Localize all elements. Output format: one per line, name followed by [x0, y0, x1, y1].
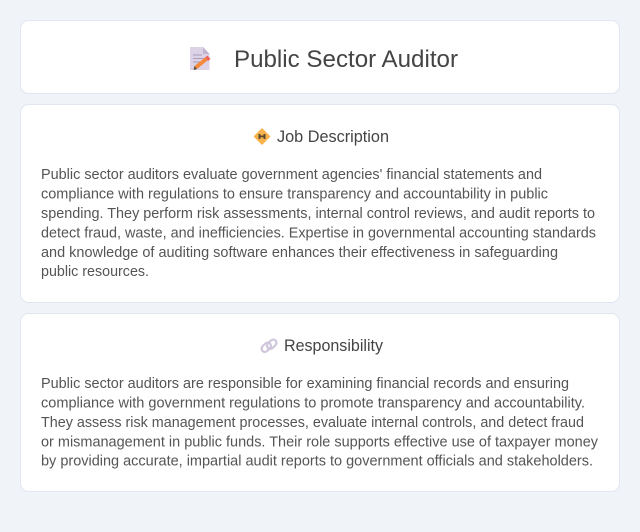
panel: job description: [20, 104, 620, 302]
panel: title card: [20, 20, 620, 94]
text block: job description: spending. They perform risk assessments, internal control reviews, and audit reports to: [41, 206, 595, 222]
text block: job description: [41, 167, 596, 280]
text block: job description: detect fraud, waste, and inefficiencies. Expertise in governmental accounting standards: [41, 226, 596, 242]
text block: responsibility: Public sector auditors are responsible for examining financial records and ensuring: [41, 376, 569, 392]
text block: responsibility: compliance with government regulations to promote transparency and accountability.: [41, 396, 585, 412]
text block: responsibility: by providing accurate, impartial audit reports to government officials and stakeholders.: [41, 454, 593, 470]
icon: warning diamond: [254, 129, 270, 144]
text block: job description: compliance with regulations to ensure transparency and accountability in public: [41, 186, 548, 202]
text block: job description: and knowledge of auditing software enhances their effectiveness in safeguarding: [41, 245, 558, 261]
icon: chain link: [260, 338, 278, 353]
text block: job description: Public sector auditors evaluate government agencies' financial statements and: [41, 167, 542, 183]
text block: responsibility: or mismanagement in public funds. Their role supports effective use of taxpayer money: [41, 434, 599, 450]
text block: job description: public resources.: [41, 264, 149, 280]
heading: job description: Job Description: [277, 128, 389, 146]
icon: document with pencil: [190, 47, 210, 70]
text block: responsibility: [41, 376, 599, 470]
text block: responsibility: They assess risk management processes, evaluate internal controls, and detect fraud: [41, 415, 584, 431]
panel: responsibility: [20, 314, 620, 492]
title: Public Sector Auditor: [234, 46, 458, 73]
heading: responsibility: Responsibility: [284, 337, 384, 355]
